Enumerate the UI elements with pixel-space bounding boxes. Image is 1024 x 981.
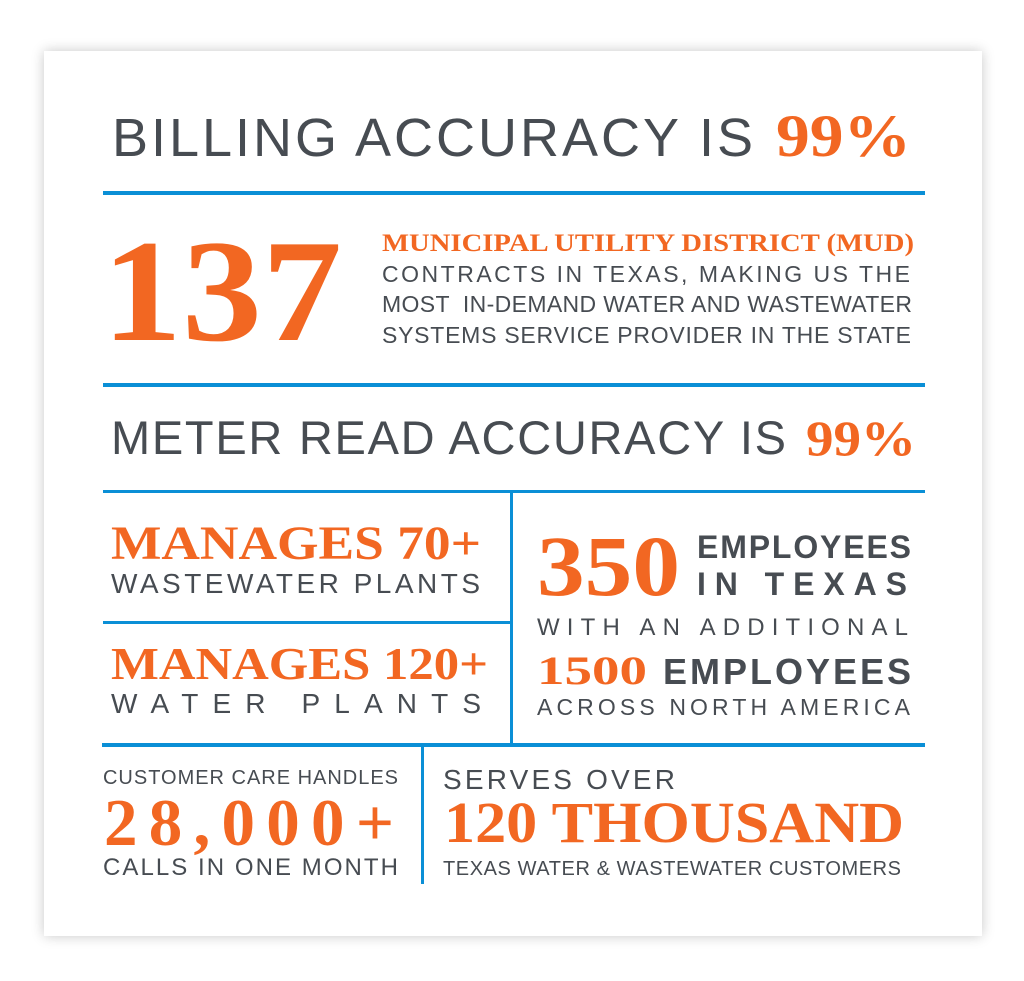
stat: employees: EMPLOYEES [663,651,911,692]
heading: billing accuracy: 99% [776,103,911,169]
stat: water plants: WATER PLANTS [111,688,481,719]
stat: 137 MUD contracts: MUNICIPAL UTILITY DISTRICT (MUD) [382,230,914,257]
stat: 137 MUD contracts: SYSTEMS SERVICE PROVIDER IN THE STATE [382,322,911,348]
stat: water plants: MANAGES 120+ [111,638,488,689]
stat: customer care calls [103,767,398,881]
heading: billing accuracy: BILLING ACCURACY IS [112,108,753,168]
stat: wastewater plants [111,517,481,599]
stat: employees: IN TEXAS [697,566,907,602]
stat: customers served: 120 THOUSAND [444,790,904,855]
stat: customer care calls: 28,000+ [104,786,394,860]
stat: employees: WITH AN ADDITIONAL [537,614,908,641]
stat: employees: 350 [537,518,680,614]
stat: customers served: SERVES OVER [443,764,675,795]
stat: customer care calls: CUSTOMER CARE HANDLES [103,767,398,789]
stat: water plants [111,638,488,719]
stat: employees [537,518,911,720]
stat: employees: ACROSS NORTH AMERICA [537,694,911,720]
stat: 137 MUD contracts: MOST IN-DEMAND WATER AND WASTEWATER [382,291,912,317]
stat: 137 MUD contracts [102,210,914,372]
stat: customer care calls: CALLS IN ONE MONTH [103,854,398,881]
stat: customers served: TEXAS WATER & WASTEWATER CUSTOMERS [443,858,901,880]
heading: meter read accuracy: 99% [806,410,916,466]
stat: customers served [443,764,904,880]
stat: 137 MUD contracts: CONTRACTS IN TEXAS, MAKING US THE [382,261,910,287]
stat: wastewater plants: MANAGES 70+ [111,517,481,570]
heading: meter read accuracy: METER READ ACCURACY IS [111,411,786,464]
stat: employees: EMPLOYEES [697,529,911,565]
stat: employees: 1500 [537,648,647,693]
stat: 137 MUD contracts: 137 [102,210,342,372]
stat: wastewater plants: WASTEWATER PLANTS [111,568,480,599]
